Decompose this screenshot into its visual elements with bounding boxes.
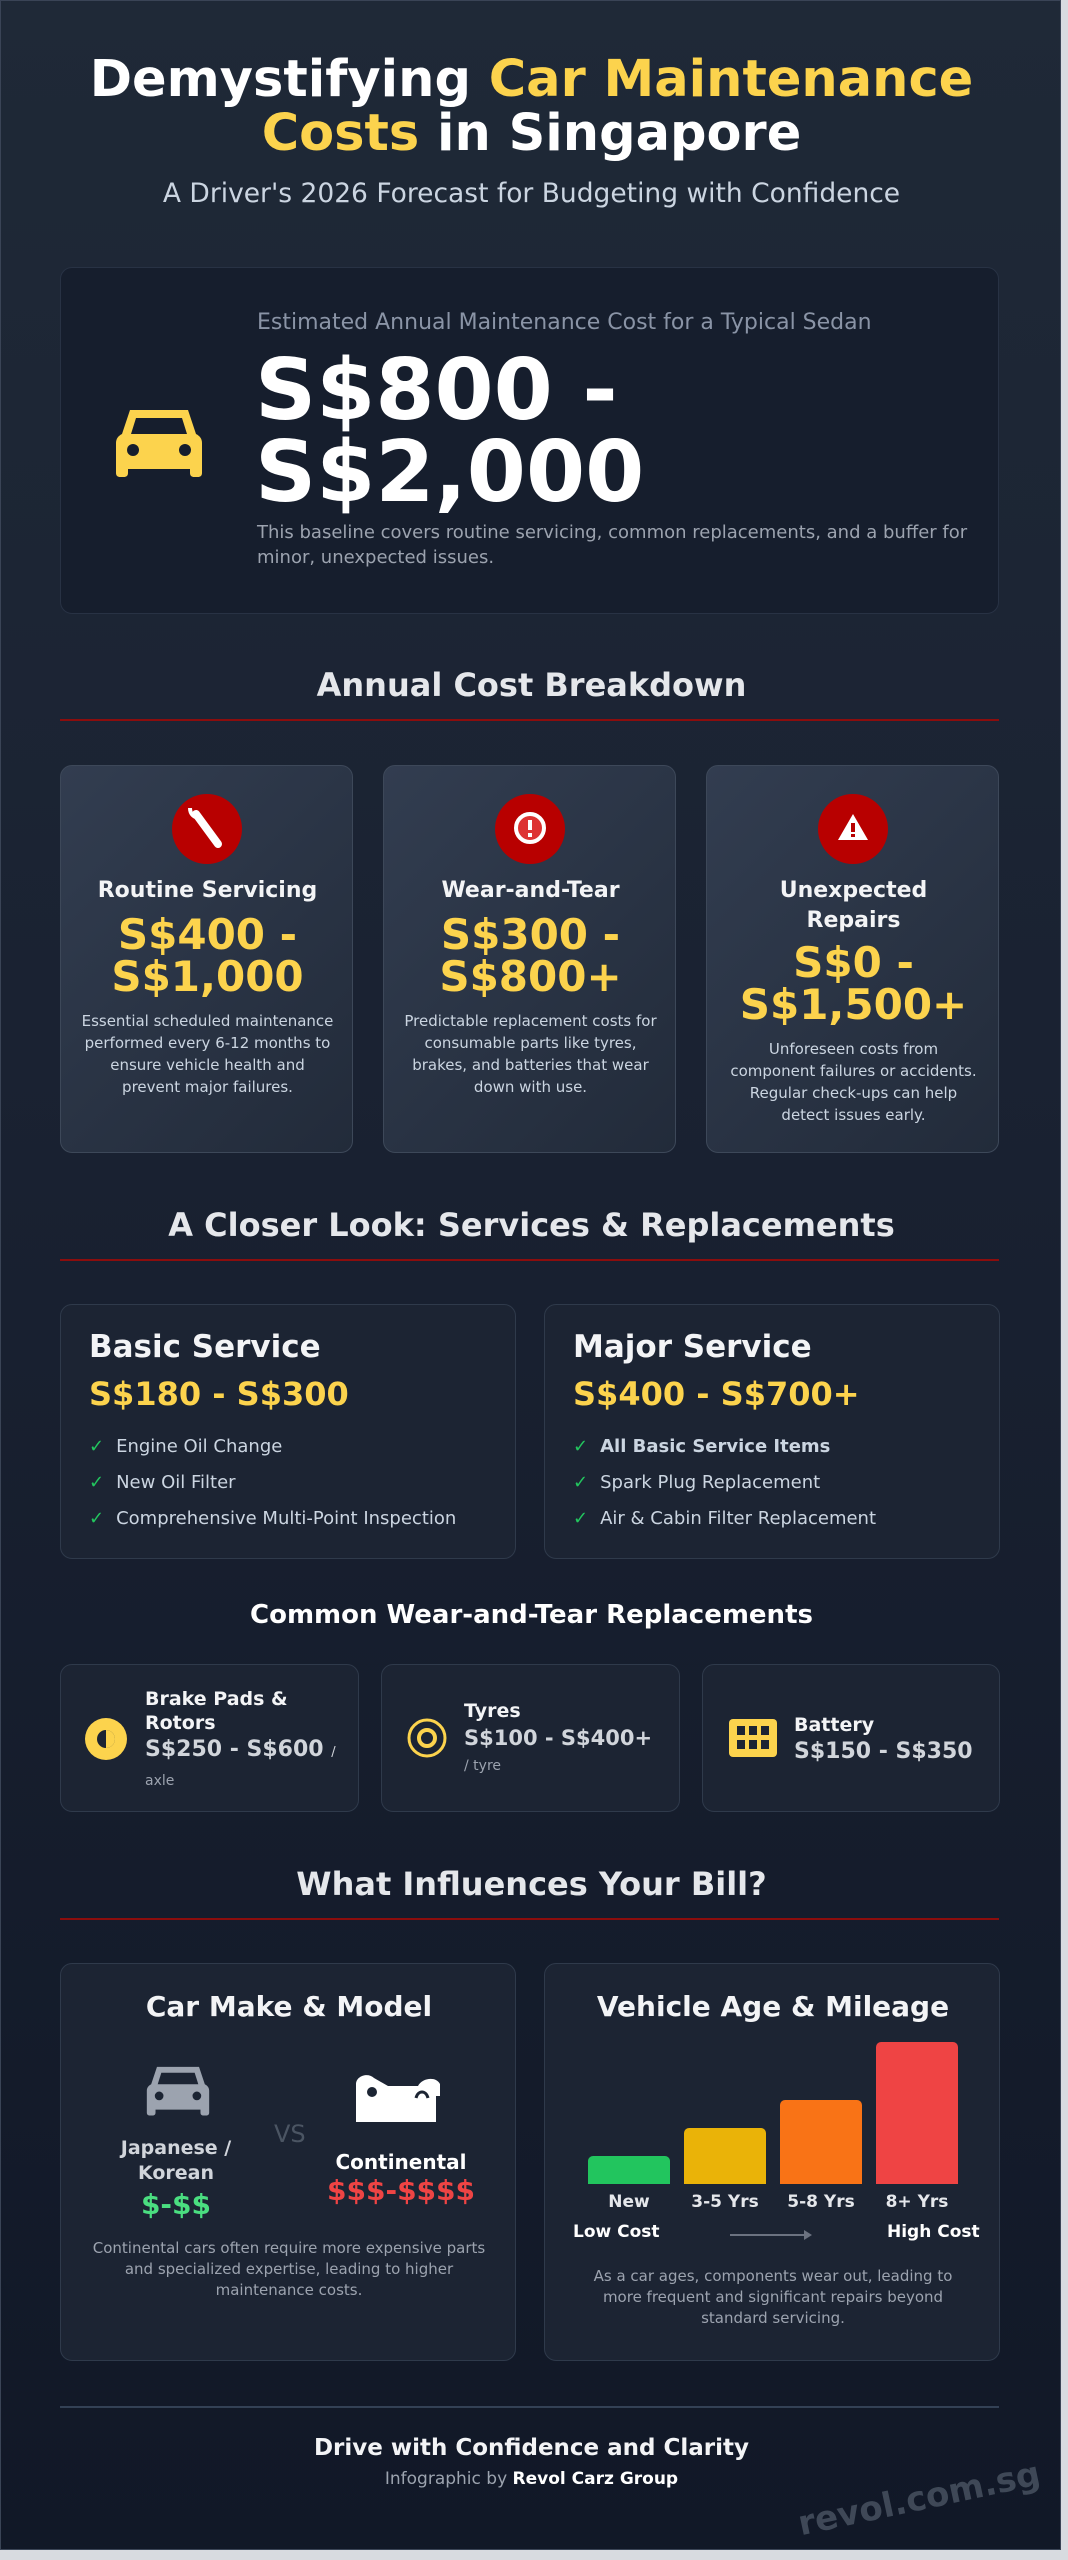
panel: hero cost bbox=[60, 267, 999, 614]
checklist: ✓ Engine Oil Change bbox=[89, 1436, 282, 1457]
checklist bbox=[89, 1436, 456, 1529]
panel: car make & model bbox=[60, 1963, 516, 2361]
japanese label: Korean bbox=[138, 2162, 214, 2184]
icon: battery bbox=[729, 1719, 777, 1757]
price: S$800+ bbox=[439, 952, 622, 1001]
footer bbox=[314, 2435, 749, 2489]
price: S$400 - bbox=[118, 910, 297, 959]
checklist: ✓ New Oil Filter bbox=[89, 1472, 236, 1493]
price bbox=[439, 910, 622, 1001]
panel: brake pads bbox=[60, 1664, 359, 1812]
watermark: revol.com.sg bbox=[795, 2454, 1044, 2544]
panel: battery bbox=[702, 1664, 1000, 1812]
title: Unexpected bbox=[780, 878, 927, 903]
text: S$100 - S$400+ bbox=[464, 1726, 652, 1750]
scale labels with arrow: High Cost bbox=[887, 2222, 980, 2242]
panel: routine servicing bbox=[60, 765, 353, 1153]
scale labels with arrow: Low Cost bbox=[573, 2222, 660, 2242]
icon: continental car bbox=[356, 2075, 440, 2122]
price: S$400 - S$700+ bbox=[573, 1375, 860, 1413]
subheading: wear and tear replacements: Common Wear-and-Tear Replacements bbox=[250, 1600, 813, 1630]
japanese label bbox=[120, 2137, 232, 2184]
icon: alert circle bbox=[495, 794, 565, 864]
panel: wear-and-tear bbox=[383, 765, 676, 1153]
scale labels with arrow bbox=[573, 2222, 980, 2242]
title: Demystifying Car Maintenance bbox=[90, 50, 973, 109]
title: Repairs bbox=[807, 908, 900, 933]
big price: S$2,000 bbox=[255, 423, 644, 522]
checklist: ✓ Comprehensive Multi-Point Inspection bbox=[89, 1508, 456, 1529]
title: Routine Servicing bbox=[98, 878, 317, 903]
panel: major service bbox=[544, 1304, 1000, 1559]
big price: S$800 - bbox=[255, 341, 618, 440]
heading: annual cost breakdown: Annual Cost Breakdown bbox=[317, 666, 746, 704]
icon: car bbox=[116, 410, 202, 477]
big price bbox=[255, 341, 644, 522]
text: Brake Pads & Rotors bbox=[145, 1688, 288, 1734]
description: Predictable replacement costs for consumable parts like tyres, brakes, and batteries that wear down with use. bbox=[404, 1012, 657, 1096]
title: Major Service bbox=[573, 1329, 812, 1365]
bar chart: 5-8 Yrs bbox=[787, 2192, 855, 2212]
title: Costs in Singapore bbox=[262, 104, 801, 163]
text: axle bbox=[145, 1773, 174, 1789]
description: This baseline covers routine servicing, common replacements, and a buffer for minor, unexpected issues. bbox=[257, 522, 967, 568]
title: Car Make & Model bbox=[146, 1990, 432, 2023]
title bbox=[90, 50, 973, 163]
text: / tyre bbox=[464, 1758, 501, 1774]
panel: unexpected repairs bbox=[706, 765, 999, 1153]
continental label: Continental bbox=[335, 2150, 467, 2174]
icon: tyre bbox=[408, 1718, 446, 1758]
text: S$250 - S$600 / bbox=[145, 1737, 336, 1762]
price: S$1,000 bbox=[111, 952, 304, 1001]
text bbox=[145, 1688, 336, 1789]
description: As a car ages, components wear out, leading to more frequent and significant repairs beyond standard servicing. bbox=[594, 2267, 952, 2327]
panel: basic service bbox=[60, 1304, 516, 1559]
description: Unforeseen costs from component failures or accidents. Regular check-ups can help detect issues early. bbox=[730, 1040, 977, 1124]
description: Essential scheduled maintenance performed every 6-12 months to ensure vehicle health and prevent major failures. bbox=[82, 1012, 333, 1096]
price: S$180 - S$300 bbox=[89, 1375, 349, 1413]
title: Vehicle Age & Mileage bbox=[597, 1990, 949, 2023]
title bbox=[780, 878, 927, 933]
bar chart bbox=[588, 2042, 958, 2212]
title: Wear-and-Tear bbox=[441, 878, 620, 903]
checklist bbox=[573, 1436, 876, 1529]
footer: Drive with Confidence and Clarity bbox=[314, 2435, 749, 2461]
price: S$0 - bbox=[793, 938, 914, 987]
text bbox=[464, 1700, 652, 1774]
panel: vehicle age & mileage bbox=[544, 1963, 1000, 2361]
japanese label: Japanese / bbox=[121, 2137, 231, 2159]
japanese cost: $-$$ bbox=[141, 2188, 211, 2221]
text bbox=[794, 1714, 973, 1764]
heading: closer look: A Closer Look: Services & Replacements bbox=[168, 1206, 895, 1244]
continental cost: $$$-$$$$ bbox=[327, 2174, 475, 2207]
bar chart: 8+ Yrs bbox=[886, 2192, 948, 2212]
description: Continental cars often require more expensive parts and specialized expertise, leading to higher maintenance costs. bbox=[93, 2239, 485, 2299]
icon: japanese car bbox=[146, 2066, 210, 2116]
checklist: ✓ Air & Cabin Filter Replacement bbox=[573, 1508, 876, 1529]
price: S$1,500+ bbox=[740, 980, 967, 1029]
icon: brake disc bbox=[85, 1718, 127, 1760]
text: Battery bbox=[794, 1714, 874, 1736]
price: S$300 - bbox=[441, 910, 620, 959]
price bbox=[111, 910, 304, 1001]
title: Basic Service bbox=[89, 1329, 321, 1365]
heading: influences: What Influences Your Bill? bbox=[296, 1865, 767, 1903]
bar chart: New bbox=[608, 2192, 650, 2212]
footer: Infographic by Revol Carz Group bbox=[385, 2469, 678, 2489]
text: S$150 - S$350 bbox=[794, 1739, 973, 1764]
checklist: ✓ Spark Plug Replacement bbox=[573, 1472, 820, 1493]
icon: warning bbox=[818, 794, 888, 864]
panel: tyres bbox=[381, 1664, 680, 1812]
vs: VS bbox=[274, 2120, 306, 2148]
icon: wrench bbox=[172, 794, 242, 864]
checklist: ✓ All Basic Service Items bbox=[573, 1436, 830, 1457]
text: Tyres bbox=[464, 1700, 521, 1722]
subtitle: A Driver's 2026 Forecast for Budgeting with Confidence bbox=[163, 178, 900, 209]
label: Estimated Annual Maintenance Cost for a Typical Sedan bbox=[257, 310, 872, 335]
price bbox=[740, 938, 967, 1029]
bar chart: 3-5 Yrs bbox=[691, 2192, 759, 2212]
